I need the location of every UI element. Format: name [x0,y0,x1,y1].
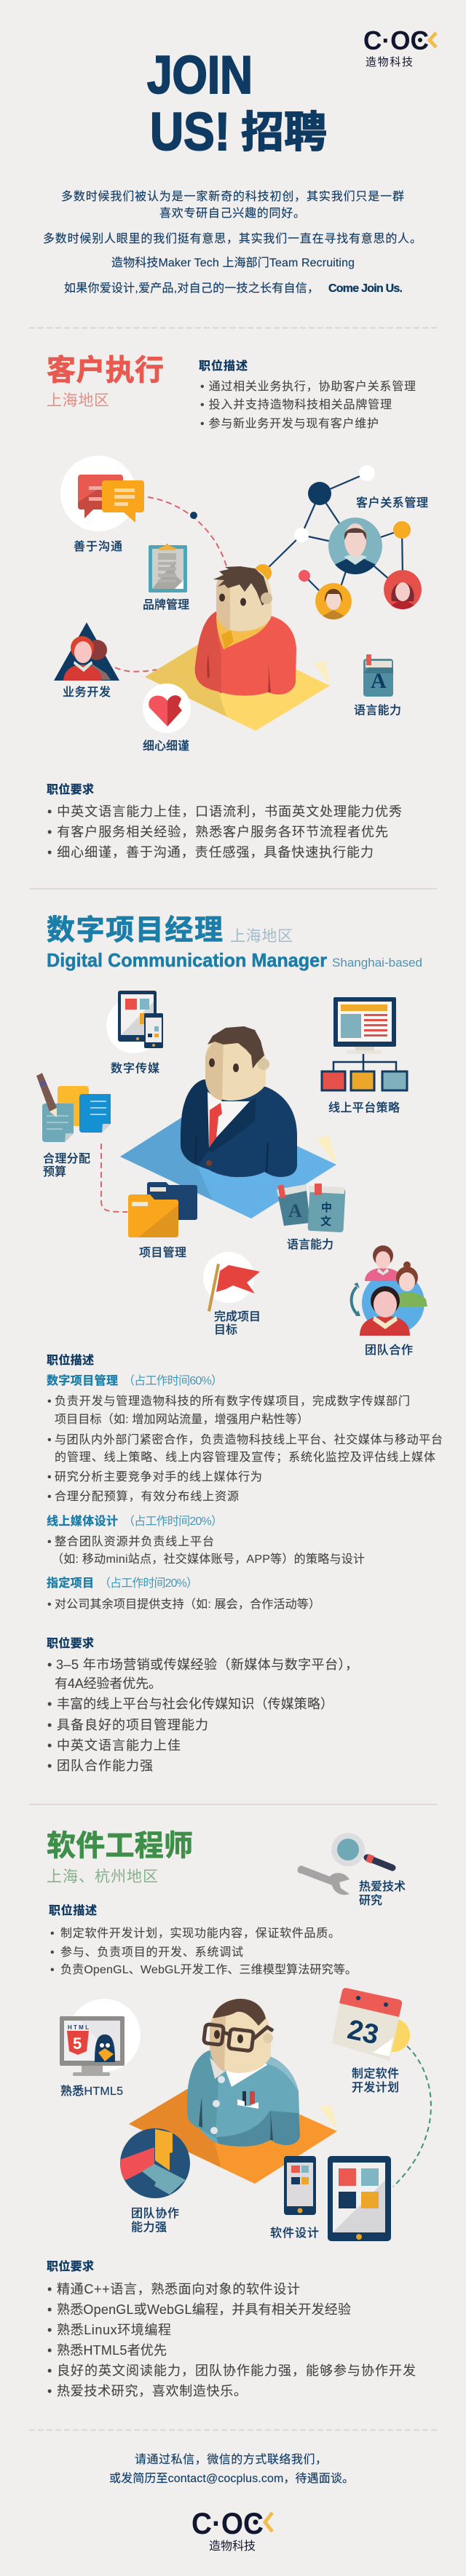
icon: handshake circle [116,2128,190,2198]
label: 完成项目目标 [214,1309,261,1336]
job description: 的管理、线上策略、线上内容管理及宣传；系统化监控及评估线上媒体 [55,1451,435,1464]
icon: HTML5 monitor: HTML [68,2024,89,2031]
icon: monitor with tree [322,997,407,1090]
job requirements: • [47,2302,52,2317]
label: 制定软件开发计划: 开发计划 [352,2081,399,2094]
person: red circle [384,570,422,609]
job description: • [50,1927,55,1940]
label: 语言能力: 语言能力 [354,704,401,717]
icon: HTML5 monitor [60,1999,141,2076]
icon: team triangle [54,622,119,681]
heading: 客户执行: 客户执行 [47,354,164,387]
icon: clipboard [149,544,187,593]
heading: 数字项目经理: 数字项目经理 [47,915,223,946]
job requirements: 熟悉HTML5者优先 [57,2343,167,2358]
job description: • [47,1471,52,1483]
dashed connector: chat to character [148,497,226,566]
job description: 项目目标（如: 增加网站流量，增强用户粘性等） [55,1413,309,1426]
job requirements: 职位要求 [47,1636,94,1650]
job requirements: • [47,1718,52,1732]
label: 完成项目目标: 完成项目 [214,1309,261,1323]
job requirements: • [47,2282,52,2296]
label: 语言能力: 语言能力 [287,1238,333,1251]
contact text: 请通过私信，微信的方式联络我们， [135,2452,327,2466]
label: 线上平台策略: 线上平台策略 [328,1101,400,1114]
job requirements: • [47,2323,52,2337]
icon: two language books: A [288,1200,302,1221]
job description: • [50,1964,55,1976]
intro text: 多数时候我们被认为是一家新奇的科技初创，其实我们只是一群 [61,190,404,203]
job requirements: 精通C++语言，熟悉面向对象的软件设计 [57,2282,300,2296]
icon: magnifier and wrench [298,1833,392,1895]
label: 业务开发: 业务开发 [63,686,111,699]
label: 合理分配预算: 合理分配 [43,1152,90,1165]
job description: 负责OpenGL、WebGL开发工作、三维模型算法研究等。 [60,1962,357,1976]
icon: tablet and phone [106,991,163,1053]
intro text: 如果你爱设计,爱产品,对自己的一技之长有自信， [64,282,319,295]
job requirements [47,782,402,860]
job requirements: • [47,2343,52,2358]
job description [49,1903,357,1976]
job description: 对公司其余项目提供支持（如: 展会，合作活动等） [55,1597,320,1611]
heading: 数字项目经理: 上海地区 [230,928,293,945]
logo: top right: C·OC [363,25,429,55]
title: JOIN US 招聘 [147,46,327,162]
heading: 数字项目经理 [47,915,422,971]
job requirements: 具备良好的项目管理能力 [57,1718,208,1732]
job requirements: 熟悉Linux环境编程 [57,2323,171,2337]
label: 善于沟通: 善于沟通 [74,540,122,553]
intro text [43,190,422,295]
label: 热爱技术研究: 热爱技术 [359,1880,406,1893]
job requirements: • [47,1697,52,1711]
job description: • [47,1395,52,1408]
job description: （占工作时间20%） [123,1515,223,1528]
label: 热爱技术研究: 研究 [359,1893,382,1907]
job requirements: • [47,1738,52,1753]
job description: 与团队内外部门紧密合作，负责造物科技线上平台、社交媒体与移动平台 [55,1433,443,1446]
icon: budget documents and pencil [36,1073,111,1142]
job requirements: 职位要求 [47,2259,94,2273]
job description: 线上媒体设计 [47,1514,118,1528]
dashed connector: budget to folders [101,1144,127,1212]
label: 品牌管理: 品牌管理 [143,598,189,611]
heading: 数字项目经理: Shanghai-based [332,956,422,970]
panel: 客户执行 [47,354,428,860]
label: 客户关系管理: 客户关系管理 [356,496,428,510]
job requirements: 熟悉OpenGL或WebGL编程，并具有相关开发经验 [57,2302,351,2317]
job description: 指定项目 [47,1576,94,1590]
dashed connector: team to mat [115,667,157,672]
title: JOIN US 招聘: 招聘 [241,108,327,156]
job requirements: • 中英文语言能力上佳，口语流利，书面英文处理能力优秀 [47,804,402,819]
label: 熟悉HTML5: 熟悉HTML5 [60,2084,123,2098]
intro text: Come Join Us. [328,282,403,295]
job description: 职位描述 [47,1353,94,1367]
job description: 合理分配预算，有效分布线上资源 [55,1489,239,1503]
label: 细心细谨: 细心细谨 [143,740,189,753]
job requirements: 良好的英文阅读能力，团队协作能力强，能够参与协作开发 [57,2363,416,2378]
job requirements: 丰富的线上平台与社会化传媒知识（传媒策略） [57,1697,333,1711]
heading: 软件工程师: 上海、杭州地区 [47,1868,158,1885]
icon: calendar: 23 [345,2014,382,2050]
job description [199,359,416,430]
label: 团队协作能力强 [131,2207,179,2234]
job description: • 通过相关业务执行，协助客户关系管理 [200,380,416,393]
job description: • [47,1598,52,1611]
label: 热爱技术研究 [359,1880,406,1907]
person: teal circle [328,518,382,579]
intro text: 多数时候别人眼里的我们挺有意思，其实我们一直在寻找有意思的人。 [43,231,422,245]
job requirements: 中英文语言能力上佳 [57,1738,181,1753]
job description: 数字项目管理 [47,1374,118,1387]
job description: 职位描述 [49,1903,97,1917]
job description: • 投入并支持造物科技相关品牌管理 [200,398,392,411]
icon: two language books: 文 [320,1215,331,1228]
panel: 数字项目经理 [36,915,443,1773]
contact text [109,2452,354,2485]
label: 制定软件开发计划 [352,2066,399,2094]
job description: （如: 移动mini站点，社交媒体账号，APP等）的策略与设计 [52,1553,365,1566]
job description: 参与、负责项目的开发、系统调试 [60,1946,243,1959]
title: JOIN US 招聘: JOIN [147,46,253,105]
heading: 软件工程师 [47,1830,193,1885]
job requirements: • 有客户服务相关经验，熟悉客户服务各环节流程者优先 [47,825,388,839]
job description: • [47,1434,52,1446]
label: 团队协作能力强: 团队协作 [131,2207,179,2220]
intro text: 造物科技Maker Tech 上海部门Team Recruiting [111,256,355,269]
icon: HTML5 monitor: 5 [73,2034,82,2053]
person: orange circle [315,583,352,623]
label: 团队合作: 团队合作 [365,1344,413,1357]
job requirements: • 细心细谨，善于沟通，责任感强，具备快速执行能力 [47,845,374,860]
job description: • 参与新业务开发与现有客户维护 [200,417,379,430]
character: digital manager on blue mat [120,1026,336,1218]
job requirements: 3–5 年市场营销或传媒经验（新媒体与数字平台）， [56,1657,358,1672]
label: 制定软件开发计划: 制定软件 [352,2066,399,2080]
job description: 整合团队资源并负责线上平台 [55,1535,214,1548]
dashed connector: calendar to tablet [393,2046,431,2187]
job description: （占工作时间20%） [99,1577,198,1590]
character: engineer on orange mat [129,1999,337,2184]
label: 团队协作能力强: 能力强 [131,2221,167,2234]
job description: • [47,1491,52,1503]
icon: language book: A [371,669,387,693]
job requirements: • [47,1759,52,1773]
job description [47,1353,443,1611]
icon: two language books: 中 [321,1202,332,1214]
panel: 软件工程师 [47,1830,431,2398]
job requirements: • [47,1657,52,1672]
intro text: 喜欢专研自己兴趣的同好。 [159,207,305,220]
job description: • [47,1536,52,1548]
icon: team [352,1245,427,1336]
job description: 负责开发与管理造物科技的所有数字传媒项目，完成数字传媒部门 [55,1395,410,1408]
icon: calendar [332,1988,410,2061]
job requirements: • [47,2363,52,2378]
job requirements: 热爱技术研究，喜欢制造快乐。 [57,2384,247,2398]
job requirements [47,2259,416,2398]
icon: phone and tablet [284,2156,391,2241]
logo: top right: 造物科技 [366,56,413,68]
label: 合理分配预算: 预算 [43,1165,66,1178]
label: 项目管理: 项目管理 [139,1245,186,1259]
character: client executive on yellow mat [145,564,330,731]
logo: top right [363,25,436,68]
job requirements: 职位要求 [47,782,94,796]
label: 软件设计: 软件设计 [270,2227,319,2240]
job requirements [47,1636,358,1773]
icon: flag [203,1252,260,1312]
contact text: 或发简历至contact@cocplus.com，待遇面谈。 [109,2472,354,2485]
logo: bottom: C·OC [191,2506,264,2540]
heading: 软件工程师: 软件工程师 [47,1830,193,1862]
icon: language book [363,654,393,697]
job description: 制定软件开发计划，实现功能内容，保证软件品质。 [60,1927,340,1940]
label: 数字传媒: 数字传媒 [111,1062,159,1075]
job description: 职位描述 [199,359,248,373]
icon: heart [143,683,191,733]
icon: chat bubbles [60,456,144,531]
heading: 客户执行: 上海地区 [47,392,109,409]
job requirements: 团队合作能力强 [57,1759,153,1773]
job description: 研究分析主要竞争对手的线上媒体行为 [55,1470,262,1483]
label: 合理分配预算 [43,1152,90,1178]
label: 完成项目目标: 目标 [214,1323,237,1336]
logo: bottom: 造物科技 [209,2540,256,2553]
job requirements: • [47,2384,52,2398]
icon: two language books [277,1184,346,1232]
job description: • [50,1946,55,1959]
heading: 数字项目经理: Digital Communication Manager [47,949,327,971]
heading: 客户执行 [47,354,164,409]
icon: folders [128,1182,197,1237]
job description: （占工作时间60%） [123,1374,223,1387]
network: client relations [263,465,422,623]
title: JOIN US 招聘: US! [150,103,230,162]
job requirements: 有4A经验者优先。 [55,1676,162,1691]
